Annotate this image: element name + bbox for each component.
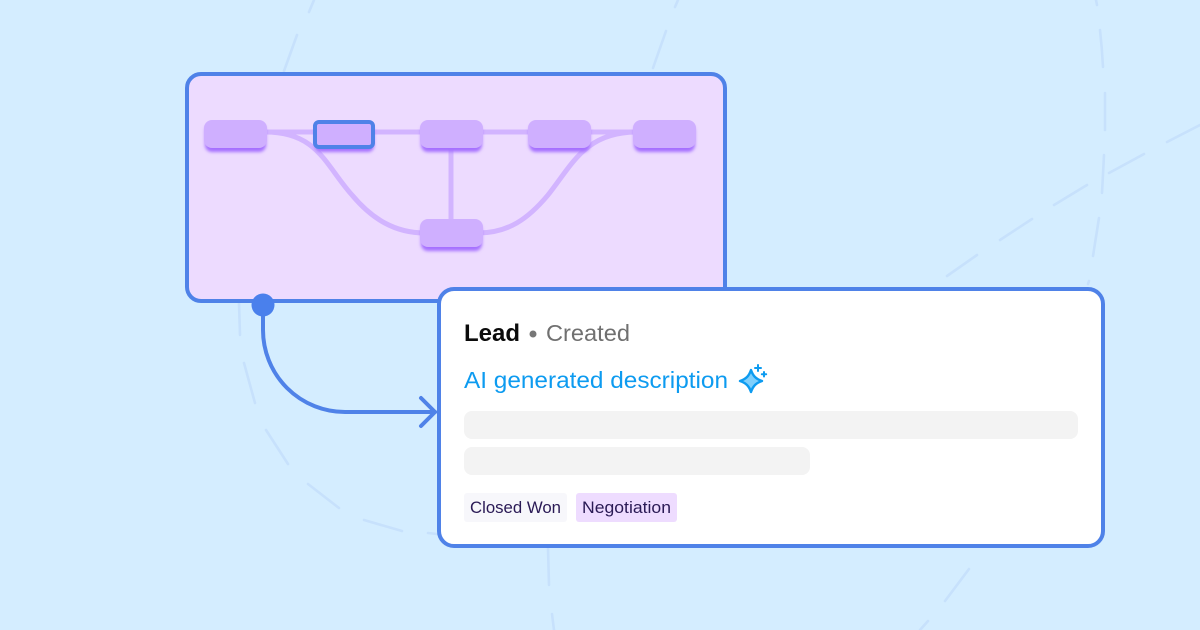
node 6 bottom — [420, 219, 483, 251]
node 5 — [633, 120, 696, 152]
tag: Closed Won — [464, 493, 567, 522]
tag: Negotiation — [576, 493, 677, 522]
subheading: AI generated description: AI generated description — [464, 367, 728, 393]
card: lead details — [439, 289, 1103, 546]
node 2 selected — [315, 122, 374, 152]
status: Created: Created — [546, 320, 630, 346]
placeholder line 1 — [464, 411, 1078, 439]
node 3 — [420, 120, 483, 152]
separator dot — [530, 330, 536, 338]
tag: Negotiation: Negotiation — [582, 499, 671, 517]
workflow connectors — [262, 132, 640, 233]
tag: Closed Won: Closed Won — [470, 499, 561, 517]
node 1 — [204, 120, 267, 152]
placeholder line 2 — [464, 447, 810, 475]
arrow: panel to card — [252, 294, 435, 426]
icon: sparkle — [740, 365, 766, 392]
panel: workflow diagram — [187, 74, 725, 301]
node 4 — [528, 120, 591, 152]
heading: Lead: Lead — [464, 320, 520, 347]
